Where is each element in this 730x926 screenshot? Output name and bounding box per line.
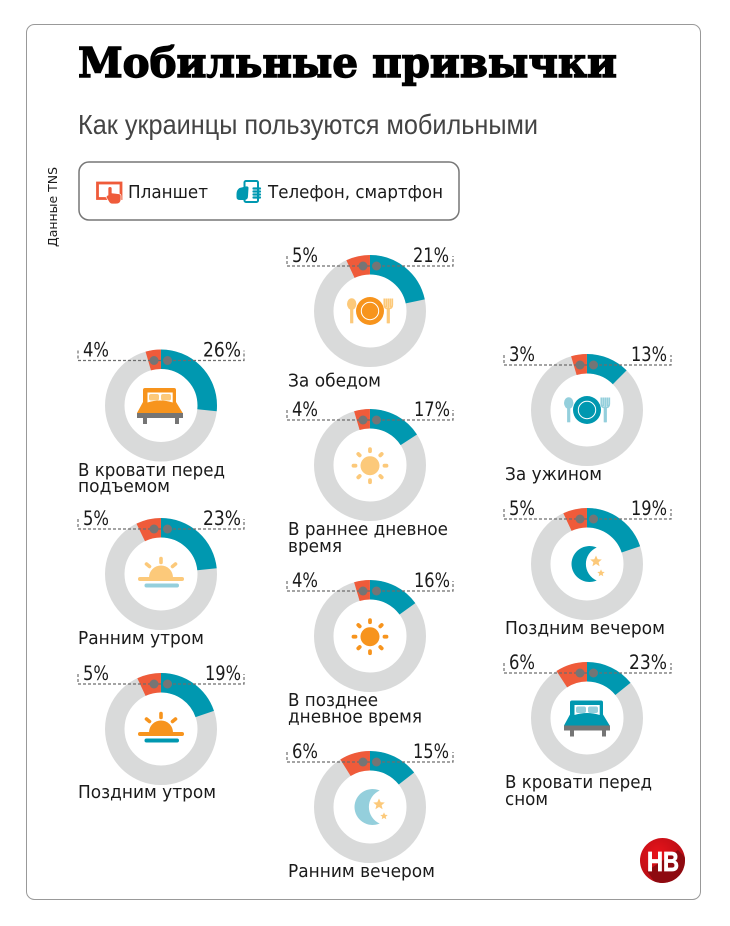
caption: Поздним вечером <box>505 619 665 639</box>
tablet share: 5% <box>83 507 109 530</box>
phone share: 15% <box>413 740 449 763</box>
leader lines <box>287 581 453 596</box>
donut: in bed before sleep <box>504 651 671 810</box>
icon: bright sun <box>354 620 386 653</box>
caption: Ранним утром <box>78 629 204 649</box>
caption <box>78 461 225 497</box>
leader lines <box>504 663 671 678</box>
tablet share: 4% <box>83 338 109 362</box>
donut: early evening <box>287 740 453 882</box>
tablet share: 5% <box>292 244 318 267</box>
legend label: phone: Телефон, смартфон <box>267 182 443 203</box>
icon: tablet <box>98 183 121 204</box>
icon: plate orange <box>347 297 392 325</box>
caption: В раннее дневное <box>288 520 448 540</box>
caption: За ужином <box>505 465 602 485</box>
tablet share: 6% <box>509 651 535 674</box>
leader lines <box>78 674 244 688</box>
donut: early afternoon <box>287 398 453 557</box>
icon: bright sunrise <box>140 714 182 740</box>
caption: В кровати перед <box>505 773 652 793</box>
leader lines <box>287 752 453 766</box>
tablet share: 4% <box>292 398 318 421</box>
logo: NV <box>640 838 685 883</box>
donut: late morning <box>78 662 244 803</box>
tablet share: 4% <box>292 569 318 592</box>
caption: В позднее <box>288 691 378 711</box>
legend label: tablet: Планшет <box>128 182 208 203</box>
caption: подъемом <box>78 477 170 497</box>
ring <box>313 408 427 522</box>
phone share: 19% <box>205 662 241 685</box>
caption <box>288 691 422 728</box>
leader lines <box>78 519 244 534</box>
icon: phone <box>236 181 260 202</box>
icon: pale sun <box>354 449 386 482</box>
caption: сном <box>505 790 548 810</box>
phone share: 23% <box>203 507 241 530</box>
ring <box>313 579 427 693</box>
phone share: 19% <box>631 497 667 520</box>
icon: teal bed <box>564 700 610 736</box>
ring <box>306 743 434 871</box>
icon: teal moon <box>572 546 605 582</box>
caption: В кровати перед <box>78 461 225 481</box>
title: Мобильные привычки <box>78 39 617 87</box>
caption: За обедом <box>288 372 381 392</box>
ring <box>309 250 431 372</box>
legend <box>79 162 459 220</box>
phone share: 17% <box>414 398 450 421</box>
caption <box>288 520 448 557</box>
donut: late afternoon <box>287 569 453 728</box>
leader lines <box>287 410 453 424</box>
ring <box>99 512 223 636</box>
icon: bed <box>137 388 183 424</box>
donut: late evening <box>504 497 671 639</box>
tablet share: 5% <box>509 497 535 520</box>
caption <box>505 773 652 810</box>
donut: at lunch <box>287 244 453 392</box>
phone share: 16% <box>414 569 450 592</box>
tablet share: 5% <box>83 662 109 685</box>
caption: дневное время <box>288 708 422 728</box>
ring <box>100 668 222 790</box>
phone share: 21% <box>413 244 449 267</box>
donut: at dinner <box>504 343 671 485</box>
phone share: 23% <box>629 651 667 674</box>
leader lines <box>504 355 671 370</box>
donut: in bed before getting up <box>78 338 244 497</box>
source note: Данные TNS <box>46 167 60 247</box>
ring <box>523 654 651 782</box>
logo: NV: НВ <box>647 846 679 877</box>
leader lines <box>78 350 244 365</box>
ring <box>526 503 648 625</box>
icon: pale moon <box>355 789 388 825</box>
tablet share: 3% <box>509 343 535 366</box>
caption: Поздним утром <box>78 783 216 803</box>
icon: plate teal <box>564 396 609 424</box>
caption: время <box>288 537 342 557</box>
tablet share: 6% <box>292 740 318 763</box>
leader lines <box>287 256 453 270</box>
phone share: 26% <box>203 338 241 362</box>
phone share: 13% <box>631 343 667 366</box>
caption: Ранним вечером <box>288 862 435 882</box>
icon: pale sunrise <box>140 558 182 586</box>
subtitle: Как украинцы пользуются мобильными <box>78 109 538 140</box>
ring <box>530 353 644 467</box>
donut: early morning <box>78 507 244 649</box>
leader lines <box>504 509 671 524</box>
ring <box>104 348 218 463</box>
